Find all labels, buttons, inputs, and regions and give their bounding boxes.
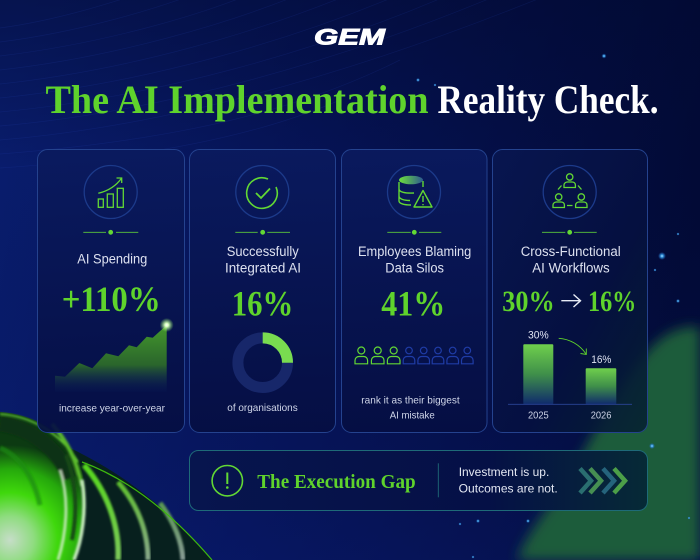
caption — [361, 395, 460, 421]
stat: 16% — [232, 284, 293, 324]
bar chart: 30% — [528, 329, 549, 341]
text — [459, 465, 558, 496]
bar chart: 16% — [591, 354, 611, 366]
icon: connected team — [543, 166, 596, 218]
title: The AI Implementation — [46, 77, 428, 122]
people pictogram — [355, 347, 473, 364]
heading — [521, 244, 621, 276]
donut chart — [238, 338, 288, 388]
divider — [235, 230, 290, 235]
panel: cross-functional AI workflows — [492, 150, 648, 432]
text: Investment is up. — [459, 465, 549, 479]
caption: of organisations — [227, 402, 298, 414]
caption: increase year-over-year — [59, 403, 165, 415]
panel: employees blaming data silos — [342, 150, 487, 432]
heading: AI Spending — [77, 251, 147, 266]
stat: 30% to 16% — [502, 285, 636, 318]
heading — [225, 244, 301, 276]
callout: the execution gap — [190, 450, 648, 510]
divider — [542, 230, 597, 235]
icon: alert — [212, 466, 242, 496]
stat: 41% — [381, 284, 445, 324]
heading: Integrated AI — [225, 261, 301, 276]
icon: database warning — [388, 166, 440, 218]
stat: 30% to 16%: 16% — [588, 285, 636, 318]
bar chart: 2026 — [591, 409, 612, 421]
text: Outcomes are not. — [459, 482, 558, 496]
green nebula — [517, 327, 700, 560]
panel: AI spending — [38, 150, 184, 432]
caption: AI mistake — [390, 409, 435, 421]
icon: chevrons — [580, 468, 625, 493]
bar chart: 2025 — [528, 409, 549, 421]
bar chart — [508, 329, 632, 421]
heading: Successfully — [227, 244, 299, 259]
stat: +110% — [62, 279, 161, 319]
heading — [358, 244, 471, 276]
heading: Employees Blaming — [358, 244, 471, 259]
decorative green swirl — [0, 412, 212, 560]
logo: GEM: GEM — [314, 24, 386, 50]
title: Reality Check. — [438, 77, 658, 122]
stat: 30% to 16%: 30% — [502, 285, 555, 318]
caption: rank it as their biggest — [361, 395, 460, 407]
heading: The Execution Gap — [257, 471, 416, 493]
icon: growth chart — [84, 166, 137, 218]
area chart — [55, 318, 174, 392]
icon: check ring — [236, 166, 289, 218]
heading: Data Silos — [385, 261, 444, 276]
title — [46, 77, 658, 122]
divider — [387, 230, 441, 235]
panel: successfully integrated AI — [190, 150, 336, 432]
heading: AI Workflows — [532, 261, 610, 276]
divider — [83, 230, 138, 235]
heading: Cross-Functional — [521, 244, 621, 259]
